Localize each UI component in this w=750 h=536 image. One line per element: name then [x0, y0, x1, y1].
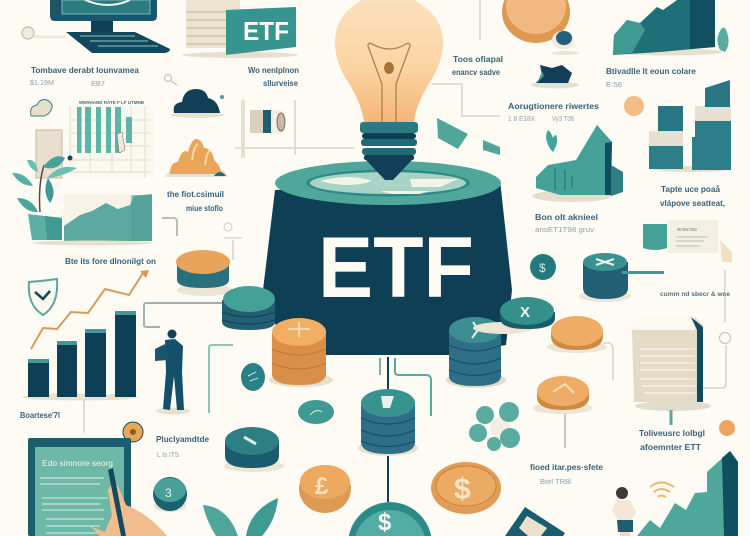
central ETF drum: ETF: [318, 220, 474, 316]
coin: teal flat: [298, 400, 334, 424]
coin stack: orange top teal base: [176, 250, 233, 296]
text: rock caption: Aorugtionere riwertes: [508, 101, 599, 111]
coin: orange low: [299, 465, 351, 513]
text: document caption: [639, 428, 705, 452]
text: bar chart caption: Boartese'7l: [20, 410, 60, 420]
text: orange coin caption: [530, 462, 603, 486]
coin: small teal left: [241, 363, 265, 391]
coin: big orange dollar: $: [454, 473, 471, 506]
icon: orange hills: [165, 139, 228, 177]
panel: tan card: [36, 130, 62, 178]
text: card caption: Wo nenlplnon: [248, 65, 299, 75]
coin stack: right of drum: [446, 317, 506, 388]
text: mountains caption: [606, 66, 696, 89]
icon: magnifier: [164, 74, 177, 85]
coin stack: upper right: [579, 253, 664, 302]
heading: bar chart title: Bte its fore dlnonilgt on: [65, 256, 156, 266]
icon: orange flower: [624, 96, 644, 116]
coin stack: centre: [358, 389, 418, 456]
text: buildings caption: [660, 184, 725, 208]
coin stack: teal left: [222, 286, 275, 330]
bulb socket: [360, 122, 418, 160]
text: hills caption: [167, 189, 224, 213]
text: orange coin caption: fioed itar.pes·sfete: [530, 462, 603, 472]
icon: clock: [22, 27, 66, 39]
icon: businessman: [155, 330, 190, 414]
chart: area chart panel: [32, 194, 152, 246]
text: orange coin caption: Btel TR8l: [540, 477, 571, 486]
coin: teal dollar at bottom: $: [378, 509, 392, 536]
panel: review card with teal stack: REVIEW CRBS: [677, 227, 697, 232]
icon: bottom leaves: [203, 498, 278, 536]
text: house caption: [535, 212, 598, 234]
icon: woman figure: [612, 487, 636, 536]
text: coin caption top: enancv sadve: [452, 67, 500, 77]
chart: teal bar chart on grid: [70, 100, 154, 178]
icon: calculator tablet: [505, 507, 565, 536]
text: document caption: afoemnter ETT: [640, 442, 702, 452]
heading: monitor caption: EB7: [91, 79, 105, 88]
coin: teal x: X: [520, 304, 530, 321]
icon: potted plant: [12, 156, 77, 240]
coin: teal x: [473, 297, 555, 334]
icon: wifi signal: [650, 482, 674, 497]
text: card caption: [248, 65, 299, 88]
coin: orange right lower: [533, 376, 593, 414]
text: coin caption top: Toos ofiapal: [453, 54, 503, 64]
icon: shield: [29, 279, 57, 315]
heading: monitor caption: $1.19M: [30, 78, 54, 87]
coin: dark teal left low: [224, 427, 284, 472]
icon: paper stack with ETF card: [182, 0, 298, 58]
text: coin caption top: [452, 54, 503, 77]
panel: tablet document: [28, 438, 131, 536]
coin: orange right upper: [547, 316, 607, 353]
coin: orange low: £: [315, 473, 329, 500]
heading: monitor caption: [30, 65, 139, 88]
coin: small teal near label: [530, 254, 556, 280]
text: mountains caption: E:56: [606, 80, 622, 89]
text: rock caption: 1 8 E18X: [508, 114, 535, 123]
panel: paper scroll document: [632, 317, 711, 425]
central ETF drum: [263, 160, 512, 355]
bulb: [335, 0, 443, 122]
chart: teal bar chart on grid: WERHAND RATE F LF UTMNB: [79, 100, 145, 105]
icon: teal flower: [469, 402, 520, 451]
coin stack: orange: [269, 318, 333, 387]
icon: circle marker right: [720, 332, 730, 344]
connector lines: [144, 303, 565, 502]
panel: tablet document: Edo simnore seorg: [42, 459, 113, 468]
icon: camera device: [241, 100, 285, 158]
icon: paper stack with ETF card: ETF: [243, 16, 289, 46]
text: mountains caption: Btivadlle lt eoun colare: [606, 66, 696, 76]
icon: orange dot: [719, 420, 735, 436]
icon: hand holding pen: [90, 468, 167, 536]
text: businessman caption: Pluclyamdtde: [156, 434, 209, 444]
icon: teal mountains top right: [612, 0, 729, 56]
text: card caption small: cumm nd sbecr & wce: [660, 291, 730, 298]
text: hills caption: the fiot.csimuil: [167, 189, 224, 199]
icon: outline cloud: [31, 100, 52, 116]
text: buildings caption: Tapte uce poaå: [661, 184, 720, 194]
panel: review card with teal stack: [643, 220, 732, 262]
icon: top orange coin: [502, 0, 579, 55]
icon: light bulb marker: [224, 223, 242, 238]
icon: cloud: [170, 89, 224, 118]
icon: orange coin marker: [123, 422, 143, 442]
chart: dark bar chart with rising arrow: [22, 270, 149, 400]
coin: big orange dollar: [431, 462, 501, 514]
icon: computer monitor and keyboard: [50, 0, 170, 53]
text: buildings caption: vlápove seatteat,: [660, 198, 725, 208]
text: businessman caption: L Is ITS: [157, 450, 179, 459]
icon: small teal dollar coin: 3: [165, 486, 172, 500]
text: rock caption: [508, 101, 599, 123]
icon: dark rock: [531, 65, 579, 88]
text: card caption: sllurveise: [263, 78, 298, 88]
icon: small teal dollar coin: [153, 477, 187, 512]
icon: teal house mountain: [532, 125, 623, 202]
heading: monitor caption: Tombave derabt lounvamea: [31, 65, 139, 75]
icon: teal folded pieces: [437, 118, 500, 155]
text: businessman caption: [156, 434, 209, 459]
coin: teal dollar at bottom: [349, 502, 431, 536]
icon: hook connector: [162, 218, 177, 236]
icon: leaf sprig: [546, 130, 557, 152]
text: rock caption: Vy3 T06: [552, 114, 574, 123]
text: house caption: ansET1T98 gruv: [535, 225, 594, 234]
icon: building stacks: [649, 80, 731, 172]
coin: small teal near label: $: [539, 261, 546, 275]
text: house caption: Bon olt aknieel: [535, 212, 598, 222]
icon: teal mountains bottom right: [637, 451, 738, 536]
text: document caption: Toliveusrc lolbgl: [639, 428, 705, 438]
text: hills caption: miue stoflo: [186, 203, 223, 213]
